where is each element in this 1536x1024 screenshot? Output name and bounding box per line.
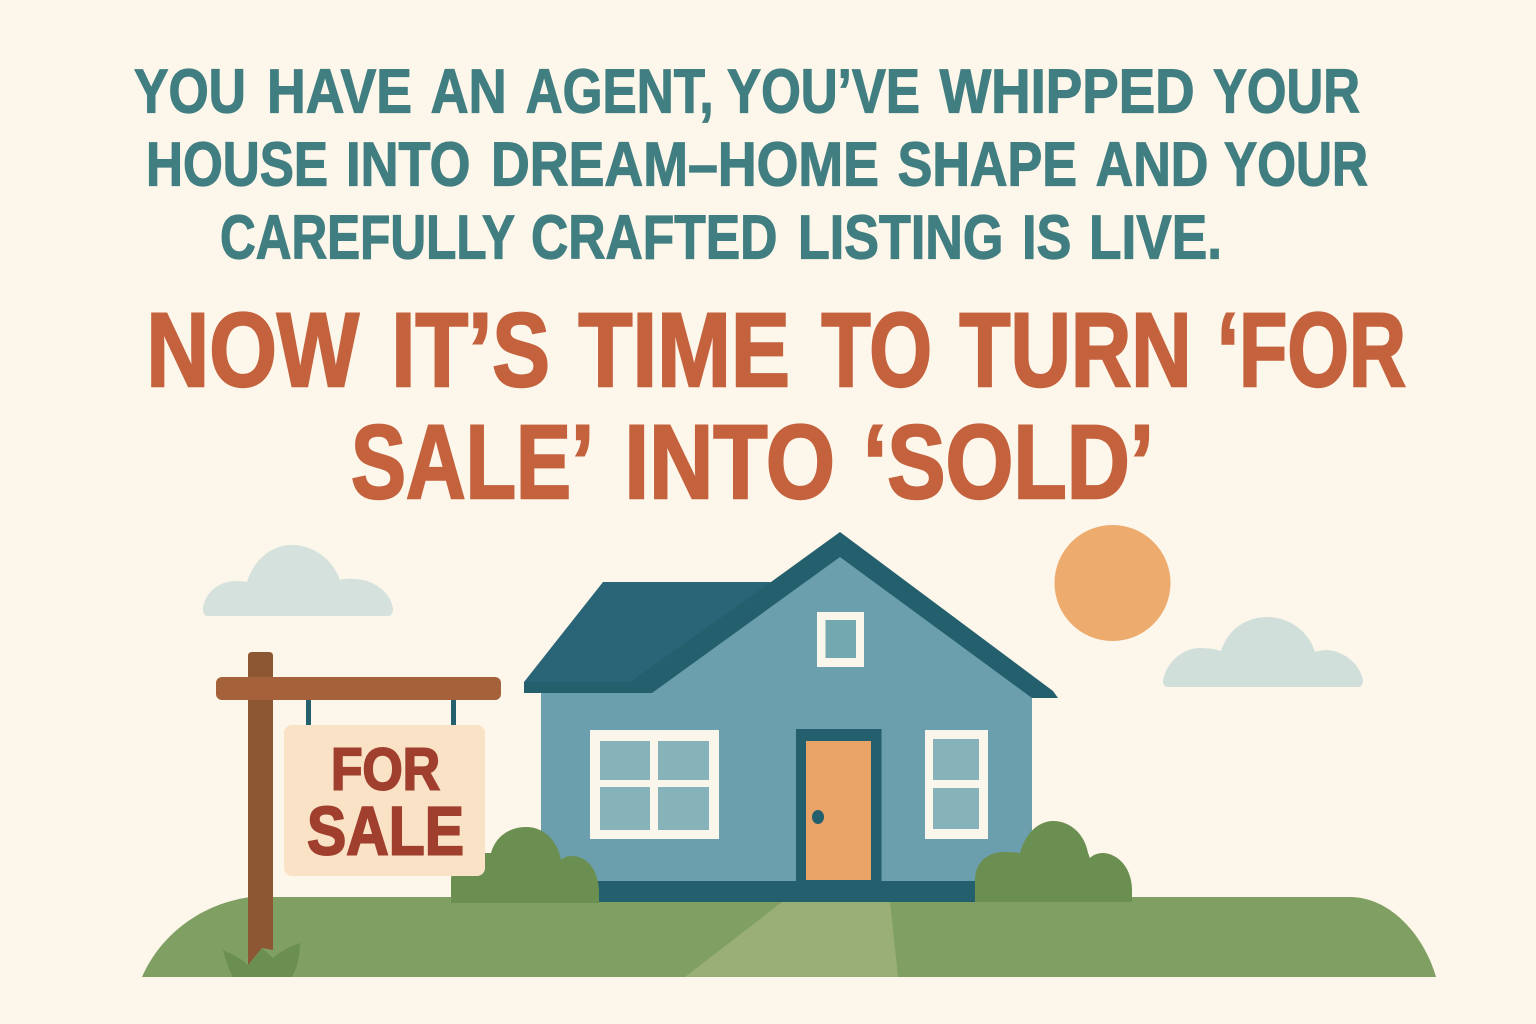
grass tuft: [223, 943, 300, 977]
intro text: YOU’VE: [727, 58, 920, 126]
door: [796, 729, 882, 902]
hanger rods: [306, 700, 456, 725]
intro text: IS: [1022, 204, 1071, 272]
crossbeam: [216, 677, 501, 700]
intro text: WHIPPED: [940, 58, 1195, 126]
foundation: [595, 881, 980, 902]
intro text: CRAFTED: [531, 204, 777, 272]
icon: sun: [1054, 525, 1170, 641]
intro text: SHAPE: [898, 130, 1077, 200]
walkway: [685, 902, 898, 977]
right window: [925, 730, 988, 839]
sign text: SALE: [307, 792, 464, 870]
intro text: YOU: [134, 58, 246, 126]
headline: [146, 292, 1406, 521]
headline: TURN: [959, 292, 1192, 409]
attic window: [817, 612, 864, 667]
headline: ‘SOLD’: [863, 404, 1154, 521]
intro text: [134, 58, 1368, 272]
sign board: [284, 725, 485, 876]
headline: IT’S: [391, 292, 550, 409]
left bush: [451, 827, 599, 903]
roof gable trim: [524, 532, 1058, 698]
headline: NOW: [146, 292, 359, 409]
for sale signpost: [216, 652, 501, 977]
right bush: [975, 821, 1132, 902]
intro text: HOUSE: [146, 130, 328, 200]
intro text: LIVE.: [1089, 204, 1222, 272]
intro text: AGENT,: [526, 58, 714, 126]
headline: SALE’: [351, 404, 594, 521]
intro text: DREAM–HOME: [491, 130, 879, 200]
intro text: HAVE: [267, 58, 412, 126]
house: [524, 532, 1058, 902]
intro text: INTO: [346, 130, 470, 200]
intro text: LISTING: [798, 204, 1003, 272]
post: [248, 652, 273, 965]
icon: right cloud: [1163, 617, 1363, 687]
intro text: CAREFULLY: [220, 204, 515, 272]
sign text: [307, 736, 464, 870]
main left roof: [524, 582, 771, 682]
ground: [142, 897, 1436, 977]
headline: TIME: [578, 292, 790, 409]
icon: left cloud: [203, 545, 393, 616]
intro text: AND: [1096, 130, 1208, 200]
intro text: YOUR: [1224, 130, 1368, 200]
intro text: AN: [431, 58, 507, 126]
headline: INTO: [624, 404, 835, 521]
left window: [590, 730, 719, 839]
headline: ‘FOR: [1217, 292, 1406, 409]
headline: TO: [821, 292, 932, 409]
intro text: YOUR: [1213, 58, 1360, 126]
house wall: [541, 550, 1032, 881]
sign text: FOR: [331, 736, 440, 802]
